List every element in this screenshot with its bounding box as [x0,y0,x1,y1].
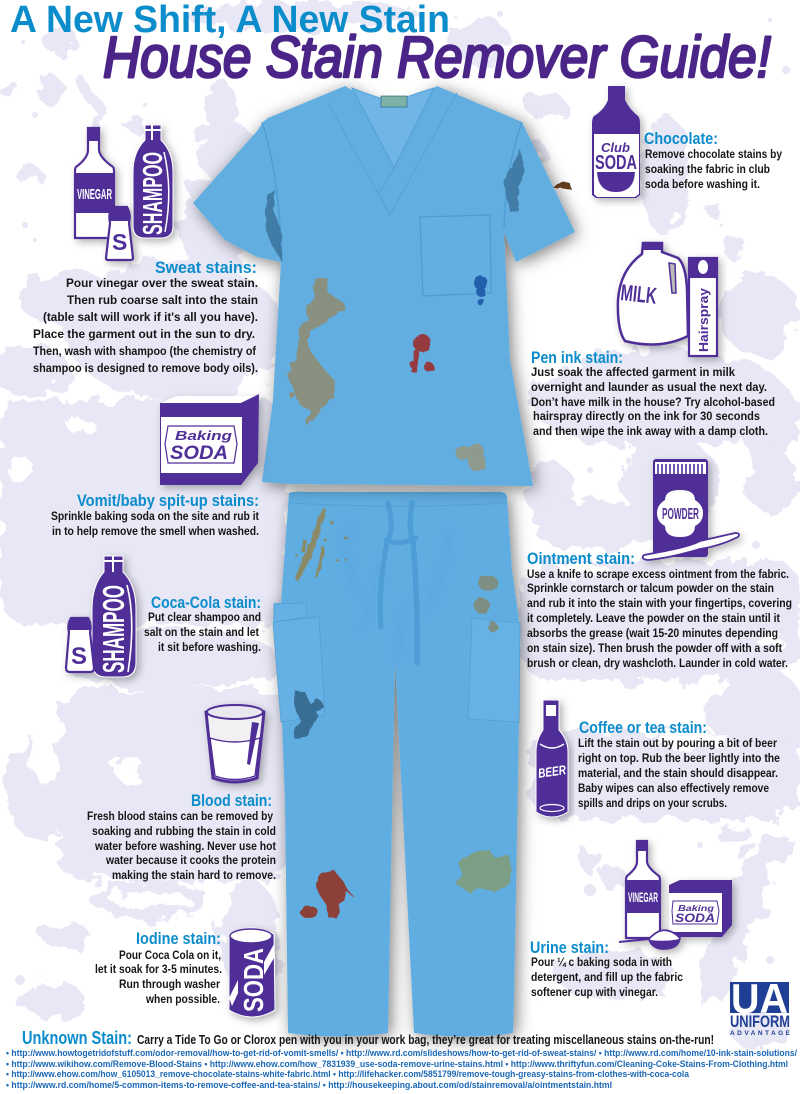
text: urine stain: softener cup with vinegar. [531,985,658,999]
text: vomit stains: Sprinkle baking soda on the site and rub it [51,509,259,523]
text: coffee or tea stain [578,718,780,810]
icon: club soda bottle [592,86,640,198]
text: urine stain: Urine stain: [530,938,609,957]
text: urine stain: Pour ¼ c baking soda in with [531,955,672,969]
text: iodine stain: Iodine stain: [136,929,221,948]
shirt breast pocket [420,215,491,296]
text: blood stain: water because it cooks the protein [105,853,276,867]
text: coffee or tea stain: Baby wipes can also effectively remove [578,781,769,795]
shirt collar label [381,96,407,107]
icons: shampoo and salt: S [71,643,87,670]
text: chocolate: soda before washing it. [645,177,760,191]
icons: vinegar, baking soda, scoop [619,840,732,949]
icons: milk jug and hairspray: Hairspray [696,287,711,352]
text: sweat stains: Then rub coarse salt into the stain [67,293,258,307]
icon: baking soda box: SODA [170,443,228,464]
icons: vinegar, shampoo, salt: VINEGAR [77,186,112,203]
shirt stains [265,150,572,471]
icon: baking soda box: Baking [175,428,232,443]
text: pen ink stain [531,348,775,438]
text: unknown stain: Unknown Stain: [22,1028,132,1048]
text: unknown stain [22,1028,714,1048]
icons: powder box and knife: POWDER [662,506,699,523]
text: urine stain [530,938,683,999]
icons: shampoo and salt [66,556,136,677]
icon: glass of water [206,705,264,782]
text: iodine stain: let it soak for 3-5 minutes. [95,962,222,976]
text: coffee or tea stain: spills and drips on your scrubs. [578,796,727,810]
text: ointment stain [527,549,792,670]
icons: vinegar, shampoo, salt: SHAMPOO [137,152,168,235]
icons: vinegar, shampoo, salt [75,125,173,260]
text: pen ink stain: and then wipe the ink away with a damp cloth. [533,424,768,438]
text: chocolate: Chocolate: [644,129,718,148]
icon: club soda bottle: SODA [595,152,637,174]
icon: soda can: SODA [238,948,269,1012]
scrub top [193,86,575,486]
logo: uniform advantage: ADVANTAGE [730,1030,791,1037]
text: vomit stains [51,491,259,538]
text: sweat stains: Pour vinegar over the sweat stain. [66,276,258,290]
text: chocolate: soaking the fabric in club [645,162,770,176]
text: coca-cola stain: salt on the stain and let [144,625,259,639]
icons: milk jug and hairspray: MILK [619,279,658,309]
text: coca-cola stain: Put clear shampoo and [148,610,261,624]
icon: club soda bottle: Club [601,140,630,155]
text: blood stain: making the stain hard to remove. [112,868,276,882]
icons: vinegar, baking soda, scoop: SODA [675,911,715,925]
text: pen ink stain: Don’t have milk in the house? Try alcohol-based [531,395,775,409]
text: vomit stains: in to help remove the smell when washed. [52,524,259,538]
title: A New Shift, A New Stain [10,0,450,41]
text: vomit stains: Vomit/baby spit-up stains: [77,491,259,510]
text: blood stain: Blood stain: [191,791,272,810]
text: chocolate [644,129,782,191]
title [10,0,771,90]
icon: beer bottle: BEER [537,762,567,781]
icons: vinegar, baking soda, scoop: Baking [678,903,715,913]
text: sweat stains: (table salt will work if it's all you have). [43,310,258,324]
icon: soda can [229,928,275,1017]
text: blood stain: Fresh blood stains can be removed by [87,809,273,823]
text: blood stain [87,791,276,882]
text: coca-cola stain: Coca-Cola stain: [151,593,261,612]
icons: powder box and knife [643,459,739,560]
logo: uniform advantage: UA [731,975,788,1022]
text: sweat stains: Place the garment out in the sun to dry. [33,327,255,341]
text: pen ink stain: hairspray directly on the ink for 30 seconds [533,409,760,423]
text: pen ink stain: overnight and launder as usual the next day. [531,380,767,394]
icons: vinegar, baking soda, scoop: VINEGAR [628,889,658,905]
text: coca-cola stain: it sit before washing. [158,640,261,654]
text: pen ink stain: Pen ink stain: [531,348,623,367]
text: urine stain: detergent, and fill up the fabric [531,970,683,984]
source links [6,1048,797,1090]
text: iodine stain: when possible. [145,992,220,1006]
drawstring [380,503,417,663]
source links: • http://www.ehow.com/how_6105013_remove-chocolate-stains-white-fabric.html • http://lifehacker.com/5851799/remove-tough-greasy-stains-from-clothes-with-coca-cola [6,1069,690,1079]
right cargo pocket [468,618,520,722]
text: sweat stains: Sweat stains: [155,258,257,277]
text: blood stain: soaking and rubbing the stain in cold [92,824,276,838]
text: ointment stain: Ointment stain: [527,549,635,568]
text: pen ink stain: Just soak the affected garment in milk [531,365,735,379]
text: sweat stains: Then, wash with shampoo (the chemistry of [33,344,257,358]
pants stains [294,508,512,918]
icons: milk jug and hairspray [618,242,717,356]
icons: vinegar, shampoo, salt: S [112,229,127,255]
left cargo pocket [273,603,325,722]
text: iodine stain [95,929,222,1006]
text: coca-cola stain [144,593,261,654]
text: sweat stains [33,258,258,375]
text: blood stain: water before washing. Never use hot [94,839,276,853]
icon: baking soda box [160,394,259,485]
text: iodine stain: Run through washer [119,977,220,991]
text: coffee or tea stain: Coffee or tea stain: [579,718,707,737]
text: sweat stains: shampoo is designed to remove body oils). [33,361,258,375]
icon: beer bottle [536,700,568,817]
scrub pants [273,492,520,1037]
icons: shampoo and salt: SHAMPOO [96,585,131,673]
text: iodine stain: Pour Coca Cola on it, [119,948,221,962]
source links: • http://www.rd.com/home/5-common-items-to-remove-coffee-and-tea-stains/ • http://housekeeping.about.com/od/stainremoval/a/ointmentstain.html [6,1080,612,1090]
